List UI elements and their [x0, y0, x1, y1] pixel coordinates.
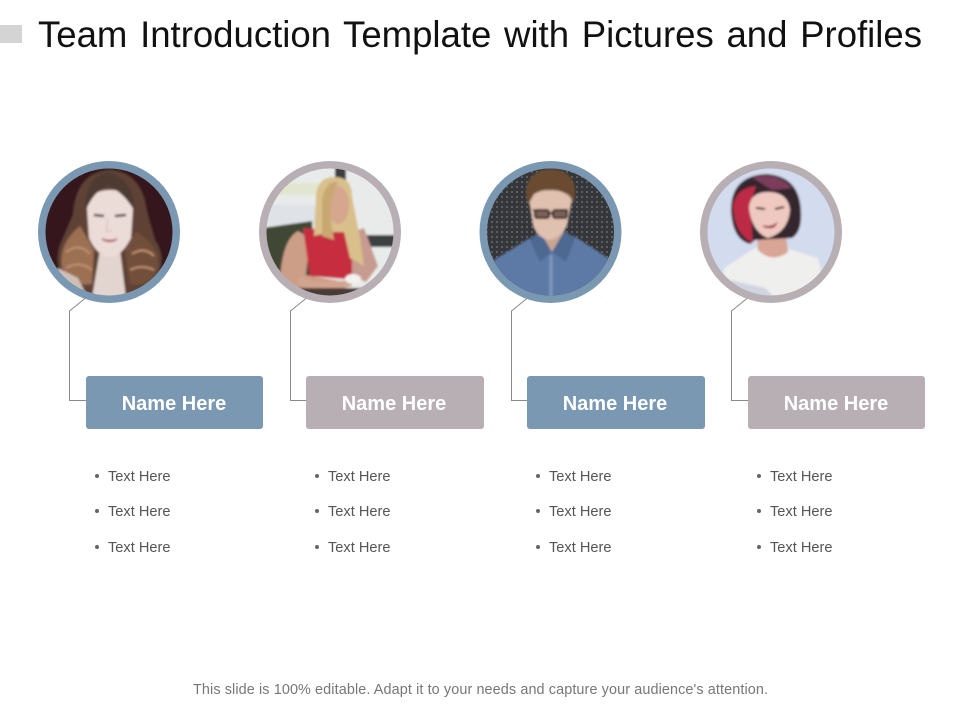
- bullet list 1: Text Here: [108, 469, 170, 485]
- bullet list 4: [757, 469, 832, 556]
- bullet list 3: Text Here: [549, 540, 611, 556]
- bullet list 2: [315, 469, 390, 556]
- connector 3: [512, 298, 528, 400]
- bullet list 4: Text Here: [770, 469, 832, 485]
- bullet list 2: Text Here: [328, 504, 390, 520]
- portrait 4: [700, 161, 842, 303]
- bullet list 1: Text Here: [108, 540, 170, 556]
- connector 1: [70, 298, 87, 400]
- connector 2: [290, 298, 307, 400]
- portrait 1: [38, 161, 180, 303]
- profile 1: [38, 161, 263, 556]
- name box 2: [306, 376, 484, 429]
- name box 3: Name Here: [563, 393, 667, 415]
- name box 4: Name Here: [784, 393, 888, 415]
- footer note: This slide is 100% editable. Adapt it to your needs and capture your audience's attention.: [193, 682, 768, 698]
- bullet list 4: Text Here: [770, 504, 832, 520]
- name box 4: [748, 376, 925, 429]
- bullet list 3: [536, 469, 611, 556]
- profile 4: [700, 161, 925, 556]
- title: Team Introduction Template with Pictures and Profiles: [38, 14, 922, 55]
- name box 3: [527, 376, 705, 429]
- bullet list 4: Text Here: [770, 540, 832, 556]
- profile 2: [259, 161, 484, 556]
- portrait 2: [259, 161, 401, 303]
- bullet list 2: Text Here: [328, 540, 390, 556]
- title accent bar: [0, 25, 22, 43]
- name box 1: Name Here: [122, 393, 226, 415]
- bullet list 2: Text Here: [328, 469, 390, 485]
- profile 3: [480, 161, 705, 556]
- bullet list 3: Text Here: [549, 504, 611, 520]
- bullet list 1: [95, 469, 170, 556]
- bullet list 1: Text Here: [108, 504, 170, 520]
- portrait 3: [480, 161, 622, 303]
- connector 4: [732, 298, 749, 400]
- bullet list 3: Text Here: [549, 469, 611, 485]
- name box 2: Name Here: [342, 393, 446, 415]
- name box 1: [86, 376, 263, 429]
